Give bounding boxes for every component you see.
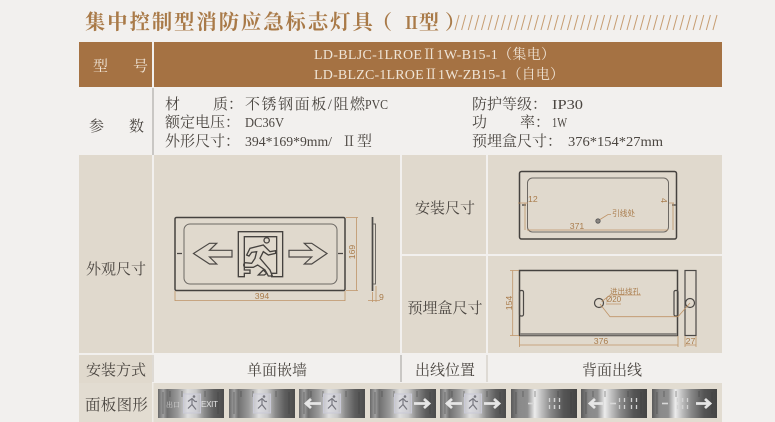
model label cell xyxy=(79,42,152,87)
model label cell: 型 xyxy=(93,57,108,75)
panel: appearance label xyxy=(79,155,152,353)
icon: right arrow xyxy=(289,243,327,264)
thumbnail 1: EXIT xyxy=(201,400,218,409)
parameters right column: 率： xyxy=(520,114,550,131)
panel: install size label: 安装尺寸 xyxy=(415,200,475,217)
panel: box size drawing: 27 xyxy=(686,336,695,346)
row: install method xyxy=(79,355,642,383)
box dimensions xyxy=(510,270,696,347)
dimension lines: 394 xyxy=(255,291,269,301)
parameters left column: 394*169*9mm/ xyxy=(245,135,332,150)
parameters right column xyxy=(472,96,663,150)
row: install method: 背面出线 xyxy=(582,361,642,379)
thumbnail 1: 出口 xyxy=(166,400,180,409)
dimension lines xyxy=(175,218,384,302)
title: 集中控制型消防应急标志灯具 xyxy=(85,11,375,34)
panel: box size label xyxy=(402,256,486,353)
parameters left column: 质： xyxy=(213,96,243,113)
panel: appearance drawing xyxy=(154,155,400,353)
parameters left column: 额定电压： xyxy=(165,113,240,131)
thumbnail 6 xyxy=(511,389,577,418)
title: Ⅱ xyxy=(403,14,420,33)
row: install method: 单面嵌墙 xyxy=(247,361,307,379)
parameters left column: PVC xyxy=(365,98,388,113)
model value cell: LD-BLJC-1LROEⅡ1W-B15-1（集电） xyxy=(314,46,555,63)
parameters left column: Ⅱ xyxy=(342,135,356,150)
panel: appearance label: 外观尺寸 xyxy=(86,261,146,278)
sign side view xyxy=(372,217,376,291)
panel: box size label: 预埋盒尺寸 xyxy=(407,300,483,317)
dimension lines: 9 xyxy=(379,292,384,302)
icon: running man exit xyxy=(238,232,283,277)
thumbnail 5 xyxy=(440,389,506,418)
thumbnail 4 xyxy=(370,389,436,418)
row: install method: 安装方式 xyxy=(86,362,146,379)
parameters right column: 预埋盒尺寸： xyxy=(472,133,562,150)
panel: box size drawing: 进出线孔 xyxy=(610,286,640,296)
parameters right column: IP30 xyxy=(552,98,583,113)
panel: install size drawing: 371 xyxy=(570,221,584,231)
title: ） xyxy=(445,12,465,34)
model label cell: 号 xyxy=(133,58,148,75)
title: 型 xyxy=(419,11,439,34)
thumbnail 3 xyxy=(299,389,365,418)
row: model xyxy=(79,42,722,87)
panel: install size drawing xyxy=(488,155,722,254)
panel graphics label: 面板图形 xyxy=(85,396,148,414)
parameters right column: 功 xyxy=(472,114,487,131)
panel: install size label xyxy=(402,155,486,254)
parameters right column: 376*154*27mm xyxy=(568,135,663,150)
parameters left column: 不锈钢面板/阻燃 xyxy=(245,95,366,113)
parameters label: 数 xyxy=(129,118,144,135)
install dimensions: 引线处 xyxy=(612,208,635,218)
thumbnail 1 xyxy=(158,389,224,418)
row: panel graphics xyxy=(79,383,722,422)
dimension lines: 169 xyxy=(347,245,357,259)
thumbnail 7 xyxy=(581,389,647,418)
parameters label: 参 xyxy=(89,118,104,135)
row: parameters xyxy=(89,88,663,155)
panel: install size drawing: 12 xyxy=(528,194,538,204)
parameters left column: DC36V xyxy=(245,116,284,131)
row: install method: 出线位置 xyxy=(415,362,475,379)
parameters right column: 防护等级： xyxy=(472,96,547,113)
icon: left arrow xyxy=(194,243,232,264)
parameters right column: 1W xyxy=(552,116,568,131)
panel: box size drawing: Ø20 xyxy=(606,295,622,304)
title: （ xyxy=(372,12,392,34)
title slash pattern xyxy=(455,15,717,30)
panel: box size drawing: 376 xyxy=(594,336,608,346)
parameters left column: 型 xyxy=(357,132,372,150)
model value cell: LD-BLZC-1LROEⅡ1W-ZB15-1（自电） xyxy=(314,66,564,83)
sign front view xyxy=(175,218,345,290)
panel: box size drawing: 154 xyxy=(504,296,514,310)
cable hole xyxy=(596,219,600,223)
parameters left column xyxy=(165,95,388,150)
panel: box size drawing xyxy=(488,256,722,353)
parameters left column: 外形尺寸： xyxy=(165,133,240,150)
model value cell xyxy=(154,42,722,87)
thumbnail 8 xyxy=(652,389,717,418)
parameters left column: 材 xyxy=(165,96,180,113)
panel: install size drawing: 4 xyxy=(659,198,669,203)
thumbnail 2 xyxy=(229,389,295,418)
